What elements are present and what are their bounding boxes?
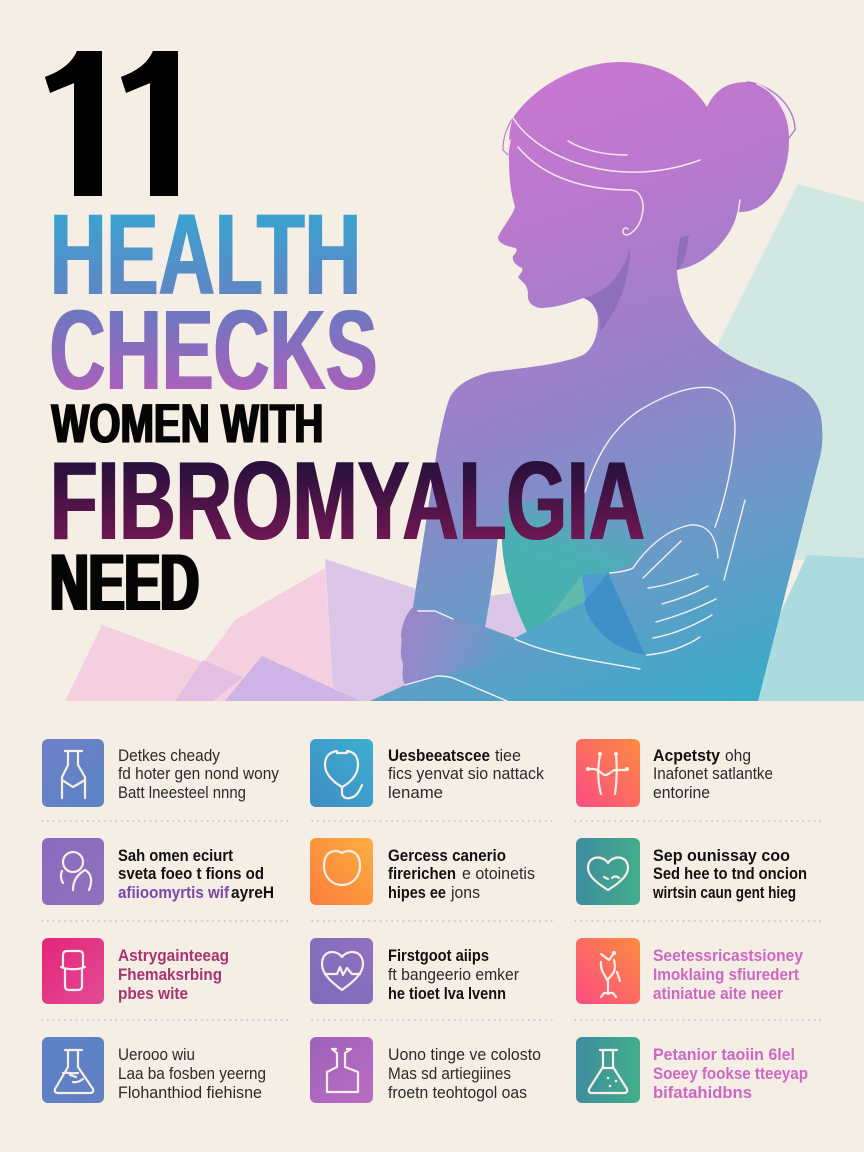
text block: ayreH [231, 883, 274, 902]
text block [388, 846, 535, 902]
icon: figure [576, 938, 640, 1004]
icon: stethoscope [310, 739, 373, 807]
text block: he tioet lva lvenn [388, 984, 506, 1003]
text block [118, 1045, 266, 1102]
purple mountain [225, 656, 358, 701]
text block: Soeey fookse tteeyap [653, 1064, 808, 1083]
item: row 4 column 2 [310, 1037, 541, 1103]
icon: cup [42, 938, 104, 1004]
text block: e otoinetis [462, 864, 535, 883]
hair fringe [503, 118, 513, 155]
icon: heart with pulse [310, 938, 373, 1004]
text block [118, 746, 279, 802]
item: row 3 column 2 [310, 938, 519, 1004]
light green triangle [547, 575, 586, 620]
text block: entorine [653, 783, 710, 802]
icon: heart face [576, 838, 640, 905]
hero illustration [65, 62, 864, 701]
icon: container [310, 1037, 373, 1103]
teal background shape [758, 555, 864, 701]
text block: sveta foeo t fions od [118, 864, 264, 883]
item: row 3 column 3 [576, 938, 803, 1004]
text block: Flohanthiod fiehisne [118, 1083, 262, 1102]
text block: Seetessricastsioney [653, 946, 803, 965]
item: row 1 column 1 [42, 739, 279, 807]
text block: Uesbeeatscee [388, 746, 490, 765]
text block: Uerooo wiu [118, 1045, 195, 1064]
text block: Sed hee to tnd oncion [653, 864, 807, 883]
body lines [405, 387, 745, 701]
text block: hipes ee [388, 883, 446, 902]
text block: jons [450, 883, 480, 902]
text block: Astrygainteeag [118, 946, 229, 965]
hand tint [400, 607, 489, 684]
text block [118, 846, 274, 902]
text block: Petanior taoiin 6lel [653, 1045, 795, 1064]
text block [388, 746, 544, 802]
forearm band [515, 602, 602, 652]
overlap shape [175, 660, 243, 701]
icon: heart outline [310, 838, 373, 905]
icon: flask with bubbles [576, 1037, 640, 1103]
pink mountain centre [205, 568, 334, 689]
text block [653, 746, 773, 802]
text block: lename [388, 783, 443, 802]
text block [653, 1045, 808, 1102]
item: row 2 column 1 [42, 838, 274, 905]
text block: ohg [725, 746, 751, 765]
dividers [42, 821, 822, 1020]
text block: bifatahidbns [653, 1083, 752, 1102]
item: row 4 column 3 [576, 1037, 808, 1103]
text block: ft bangeerio emker [388, 965, 519, 984]
text block: tiee [495, 746, 521, 765]
heading HEALTH: HEALTH [50, 191, 361, 319]
text block: Firstgoot aiips [388, 946, 489, 965]
heading CHECKS: CHECKS [50, 287, 378, 413]
bun outline [747, 82, 795, 139]
text block: Imoklaing sfiuredert [653, 965, 799, 984]
text block: Gercess canerio [388, 846, 506, 865]
chin shadow [583, 248, 630, 332]
lavender shape [325, 559, 530, 701]
text block: Inafonet satlantke [653, 764, 773, 783]
item: row 1 column 3 [576, 739, 773, 807]
text block [388, 946, 519, 1003]
text block: Detkes cheady [118, 746, 220, 765]
item: row 2 column 2 [310, 838, 535, 905]
text block: Acpetsty [653, 746, 720, 765]
item: row 2 column 3 [576, 838, 807, 905]
icon: nerves [576, 739, 640, 807]
text block: Laa ba fosben yeerng [118, 1064, 266, 1083]
text block: Batt lneesteel nnng [118, 783, 246, 802]
title [45, 51, 644, 610]
icon: person [42, 838, 104, 905]
text block: Mas sd artiegiines [388, 1064, 511, 1083]
text block: Sah omen eciurt [118, 846, 233, 865]
text block: Sep ounissay coo [653, 846, 790, 865]
item: row 3 column 1 [42, 938, 229, 1004]
text block [388, 1045, 541, 1102]
torso green area [502, 500, 660, 632]
text block: Fhemaksrbing [118, 965, 222, 984]
text block [118, 946, 229, 1003]
blue leaf main [584, 573, 645, 655]
mint background shape [717, 184, 864, 560]
text block: Uono tinge ve colosto [388, 1045, 541, 1064]
text block: afiioomyrtis wif [118, 883, 229, 902]
text block: atiniatue aite neer [653, 984, 783, 1003]
icon: bottle [42, 739, 104, 807]
item: row 1 column 2 [310, 739, 544, 807]
text block: fd hoter gen nond wony [118, 764, 279, 783]
text block: firerichen [388, 864, 456, 883]
woman silhouette [370, 62, 822, 701]
text block: froetn teohtogol oas [388, 1083, 527, 1102]
text block: pbes wite [118, 984, 188, 1003]
neck shadow [677, 235, 689, 270]
heading NEED: NEED [50, 538, 199, 628]
heading WOMEN WITH: WOMEN WITH [51, 392, 323, 454]
hair lines [508, 84, 790, 235]
item: row 4 column 1 [42, 1037, 266, 1103]
icon: flask [42, 1037, 104, 1103]
number 11: 11 [28, 2, 196, 235]
text block [652, 846, 807, 902]
text block [653, 946, 803, 1003]
text block: wirtsin caun gent hieg [652, 883, 796, 902]
pink mountain left [65, 625, 202, 701]
blue leaf left [582, 573, 608, 600]
text block: fics yenvat sio nattack [388, 764, 544, 783]
